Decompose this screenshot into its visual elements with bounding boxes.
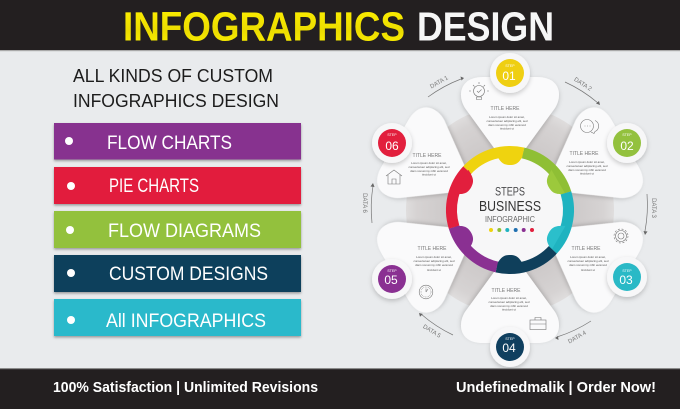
step badge 03 — [607, 257, 647, 297]
petal 01 — [461, 77, 559, 170]
list button: flow charts — [54, 123, 301, 160]
footer text left: 100% Satisfaction | Unlimited Revisions — [53, 379, 318, 396]
petal text 03: tincidunt ut — [581, 268, 595, 272]
icon: clock — [419, 285, 433, 299]
icon: light bulb — [469, 82, 489, 100]
petal text 03: Lorem ipsum dolor sit amet, — [570, 255, 606, 259]
step badge 05: STEP — [387, 269, 397, 273]
diagram: steps business infographic — [361, 53, 656, 367]
petal text 02: Lorem ipsum dolor sit amet, — [569, 160, 605, 164]
arrow: data 6: DATA 6 — [361, 193, 367, 214]
petal text 04 — [489, 288, 530, 312]
petal 05 — [370, 188, 500, 319]
petal 03 — [520, 188, 650, 319]
petal text 06: diam nonummy nibh euismod — [410, 169, 448, 173]
heading: all kinds of custom infographics design: INFOGRAPHICS DESIGN — [73, 91, 279, 111]
footer band — [0, 368, 680, 409]
arrow: data 2: DATA 2 — [573, 77, 593, 93]
petal text 03: diam nonummy nibh euismod — [569, 263, 607, 267]
list button: pie charts: PIE CHARTS — [109, 175, 199, 197]
step badge 06: 06 — [385, 139, 399, 153]
heading: all kinds of custom infographics design — [73, 66, 279, 111]
step badge 02 — [607, 123, 647, 163]
petal text 06 — [409, 153, 450, 176]
heading: all kinds of custom infographics design: ALL KINDS OF CUSTOM — [73, 66, 273, 86]
petal 02 — [520, 101, 650, 232]
petal text 02: diam nonummy nibh euismod — [568, 168, 606, 172]
step badge 01: 01 — [502, 69, 516, 83]
step badge 05 — [372, 259, 412, 299]
ring segment: red — [438, 169, 482, 227]
petal text 06: tincidunt ut — [422, 172, 436, 176]
petal text 02: consectetuer adipiscing elit, sed — [567, 164, 608, 168]
title: INFOGRAPHICS — [123, 4, 405, 50]
petal text 03: consectetuer adipiscing elit, sed — [568, 259, 609, 263]
petal text 05: Lorem ipsum dolor sit amet, — [416, 255, 452, 259]
list button: all infographics: All INFOGRAPHICS — [106, 310, 266, 332]
arrow: data 1: DATA 1 — [429, 75, 450, 90]
step badge 01: STEP — [505, 64, 515, 68]
petal text 01: tincidunt ut — [500, 126, 514, 130]
petal text 01: consectetuer adipiscing elit, sed — [487, 119, 528, 123]
centre colour dots — [489, 228, 534, 232]
centre text: STEPS — [495, 186, 525, 198]
petal text 04: Lorem ipsum dolor sit amet, — [491, 296, 527, 300]
petal text 04: diam nonummy nibh euismod — [490, 304, 528, 308]
icon: briefcase — [530, 318, 546, 330]
step badge 04: 04 — [502, 341, 516, 355]
step badge 06: STEP — [387, 133, 397, 137]
grey backing disc — [406, 106, 614, 314]
petal text 01: diam nonummy nibh euismod — [488, 123, 526, 127]
step badge 01 — [490, 53, 530, 93]
petal text 06: Lorem ipsum dolor sit amet, — [411, 161, 447, 165]
ring segment: teal — [538, 193, 582, 251]
arrow: data 3: DATA 3 — [650, 198, 656, 219]
list button: flow charts: FLOW CHARTS — [107, 132, 232, 154]
petal text 04: TITLE HERE — [492, 288, 521, 294]
list button: pie charts — [54, 167, 301, 204]
header band — [0, 0, 680, 51]
icon: chat bubbles — [580, 120, 599, 134]
centre text — [479, 186, 541, 224]
ring segment: purple — [452, 218, 497, 276]
petal text 05: diam nonummy nibh euismod — [415, 263, 453, 267]
petal text 04: consectetuer adipiscing elit, sed — [489, 300, 530, 304]
list button: custom designs — [54, 255, 301, 292]
list button: custom designs: CUSTOM DESIGNS — [109, 263, 268, 285]
step badge 03: STEP — [622, 269, 632, 273]
petal text 05: TITLE HERE — [418, 246, 447, 252]
step badge 05: 05 — [384, 273, 398, 287]
list button: flow diagrams: FLOW DIAGRAMS — [108, 220, 261, 242]
ring segment: green — [523, 144, 568, 202]
arrow: data 6 — [361, 183, 374, 223]
petal text 02 — [567, 151, 608, 176]
petal text 06: TITLE HERE — [412, 153, 442, 159]
centre disc — [456, 156, 564, 264]
step badge 02: STEP — [622, 133, 632, 137]
petal text 05: consectetuer adipiscing elit, sed — [414, 259, 455, 263]
arrow: data 4: DATA 4 — [567, 330, 588, 345]
step badge 06 — [372, 123, 412, 163]
step badge 03: 03 — [619, 273, 633, 287]
petal text 06: consectetuer adipiscing elit, sed — [409, 165, 450, 169]
title: DESIGN — [417, 4, 554, 50]
step badge 04 — [490, 327, 530, 367]
footer text right: Undefinedmalik | Order Now! — [456, 379, 656, 396]
petal text 01 — [487, 106, 528, 130]
arrow: data 2 — [565, 77, 600, 105]
petal text 05: tincidunt ut — [427, 268, 441, 272]
petal text 03: TITLE HERE — [572, 246, 601, 252]
petal text 01: TITLE HERE — [490, 106, 520, 112]
petal 06 — [370, 101, 500, 232]
arrow: data 5 — [419, 313, 453, 340]
icon: house — [386, 170, 402, 184]
petal text 02: TITLE HERE — [570, 151, 599, 157]
petal text 02: tincidunt ut — [580, 172, 594, 176]
petal 04 — [461, 250, 559, 343]
centre text: BUSINESS — [479, 198, 541, 215]
step badge 02: 02 — [620, 139, 634, 153]
centre text: INFOGRAPHIC — [485, 215, 535, 224]
ring segment: yellow — [467, 151, 524, 170]
step badge 04: STEP — [505, 337, 515, 341]
icon: gear — [614, 229, 628, 243]
arrow: data 1 — [428, 75, 464, 97]
petal text 01: Lorem ipsum dolor sit amet, — [489, 115, 525, 119]
ring segment: navy — [496, 250, 553, 269]
petal text 05 — [414, 246, 455, 272]
petal text 03 — [568, 246, 609, 272]
list button: flow diagrams — [54, 211, 301, 248]
arrow: data 5: DATA 5 — [421, 324, 442, 340]
arrow: data 4 — [555, 321, 591, 345]
list button: all infographics — [54, 299, 301, 336]
arrow: data 3 — [644, 194, 656, 235]
petal text 04: tincidunt ut — [502, 308, 516, 312]
